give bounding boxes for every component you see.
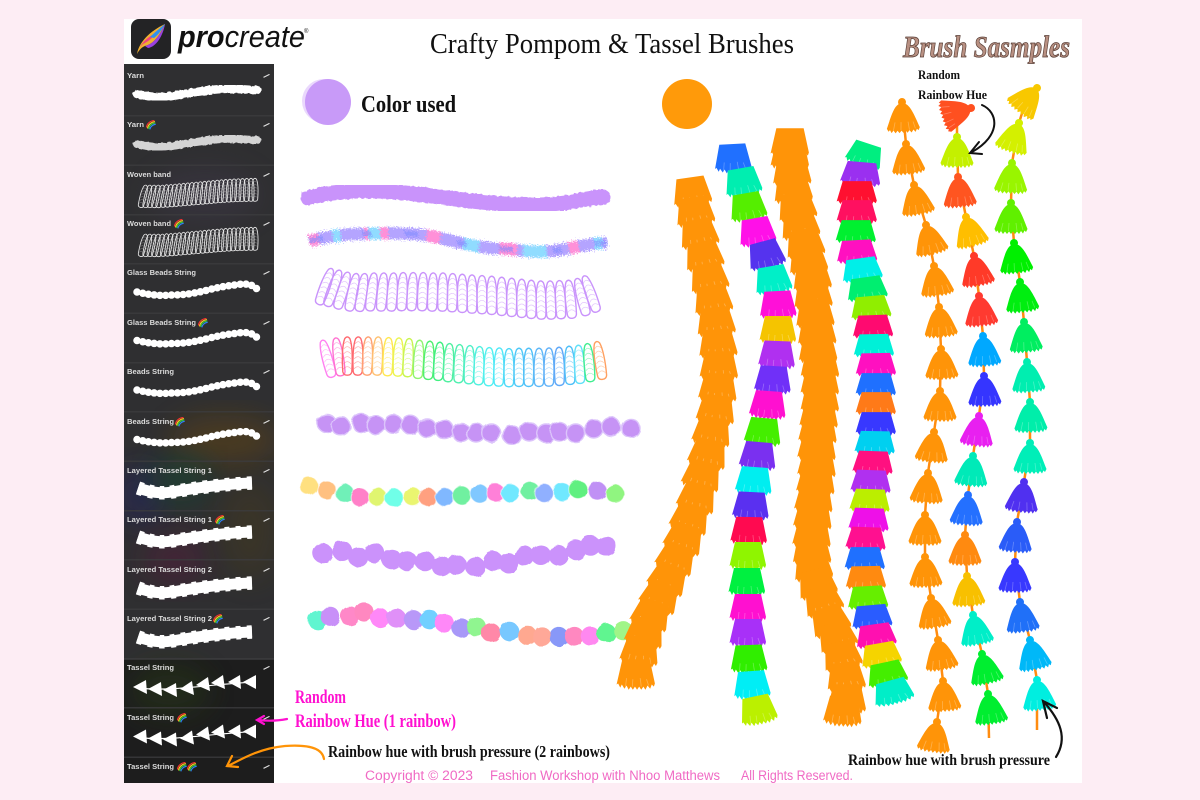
solid beads rainbow [308,602,633,647]
pompom strand rainbow left [714,143,797,729]
wordmark: procreate [177,19,305,54]
tassel string column B [936,91,1009,738]
glass beads purple [317,414,640,444]
brush list labels: Woven band [127,219,171,228]
copyright footer: All Rights Reserved. [741,768,853,783]
pompom strand rainbow right [836,138,915,710]
glass beads rainbow [300,477,624,507]
brush list labels: Beads String [127,367,174,376]
swatch: purple colour used [302,79,351,125]
registered mark: ® [304,28,309,35]
arrow: magenta to tassel string [257,716,287,724]
layered tassel orange strand left [617,175,738,690]
callout: random rainbow hue 1 rainbow: Rainbow Hue (1 rainbow) [295,711,456,732]
woven band thumbnails [138,178,258,257]
brush list labels: Tassel String [127,713,174,722]
procreate logo [131,19,309,59]
brush list labels: Layered Tassel String 1 [127,466,213,475]
callout: rainbow hue 2 rainbows: Rainbow hue with brush pressure (2 rainbows) [328,742,610,761]
infographic canvas [124,19,1082,783]
callout: random rainbow hue top: Rainbow Hue [918,87,987,102]
yarn rainbow stroke [309,233,607,252]
callout: random rainbow hue 1 rainbow: Random [295,687,346,708]
callout: rainbow hue with brush pressure: Rainbow hue with brush pressure [848,752,1050,769]
copyright footer: Fashion Workshop with Nhoo Matthews [490,768,720,783]
brush list labels: Glass Beads String [127,318,196,327]
icons: rainbow markers [146,120,224,771]
tassel string thumbnails [133,675,256,746]
brush list labels: Yarn [127,120,144,129]
brush list labels: Yarn [127,71,144,80]
arrow: black to lime tassel [970,105,994,154]
arrow: black to teal tassel [1043,701,1062,757]
brush list labels: Glass Beads String [127,268,196,277]
title: Crafty Pompom & Tassel Brushes [430,29,794,60]
white sheet [124,19,1082,783]
copyright footer: Copyright © 2023 [365,768,473,783]
brush list labels: Beads String [127,417,174,426]
callout: random rainbow hue 1 rainbow [295,687,456,732]
swatch: orange colour used [662,79,712,129]
tassel string column A [885,97,962,755]
brush list labels: Layered Tassel String 1 [127,515,213,524]
layered tassel orange strand middle [771,128,866,728]
yarn purple stroke [308,191,603,205]
brush list labels: Layered Tassel String 2 [127,565,212,574]
brush list labels: Woven band [127,170,171,179]
brush list labels [127,71,213,771]
brush list labels: Tassel String [127,762,174,771]
panel: brush library [118,64,280,783]
icons: brush edit slashes [263,74,270,769]
copyright footer [365,768,853,783]
yarn thumbnails [137,89,257,147]
callout: random rainbow hue top [918,67,987,102]
brush list labels: Layered Tassel String 2 [127,614,212,623]
icon: procreate app [131,19,171,59]
label: color used: Color used [361,92,457,118]
woven band rainbow [318,337,608,387]
callout: random rainbow hue top: Random [918,67,960,82]
glass bead thumbnails [137,284,257,344]
tassel string column C [994,75,1057,730]
brush samples heading: Brush Sasmples [902,29,1070,64]
brush list labels: Tassel String [127,663,174,672]
bead thumbnails [137,382,257,443]
woven band purple [314,267,602,319]
solid beads purple [313,536,616,577]
arrow: orange to tassel string [227,746,324,767]
layered tassel thumbnails [138,483,252,642]
